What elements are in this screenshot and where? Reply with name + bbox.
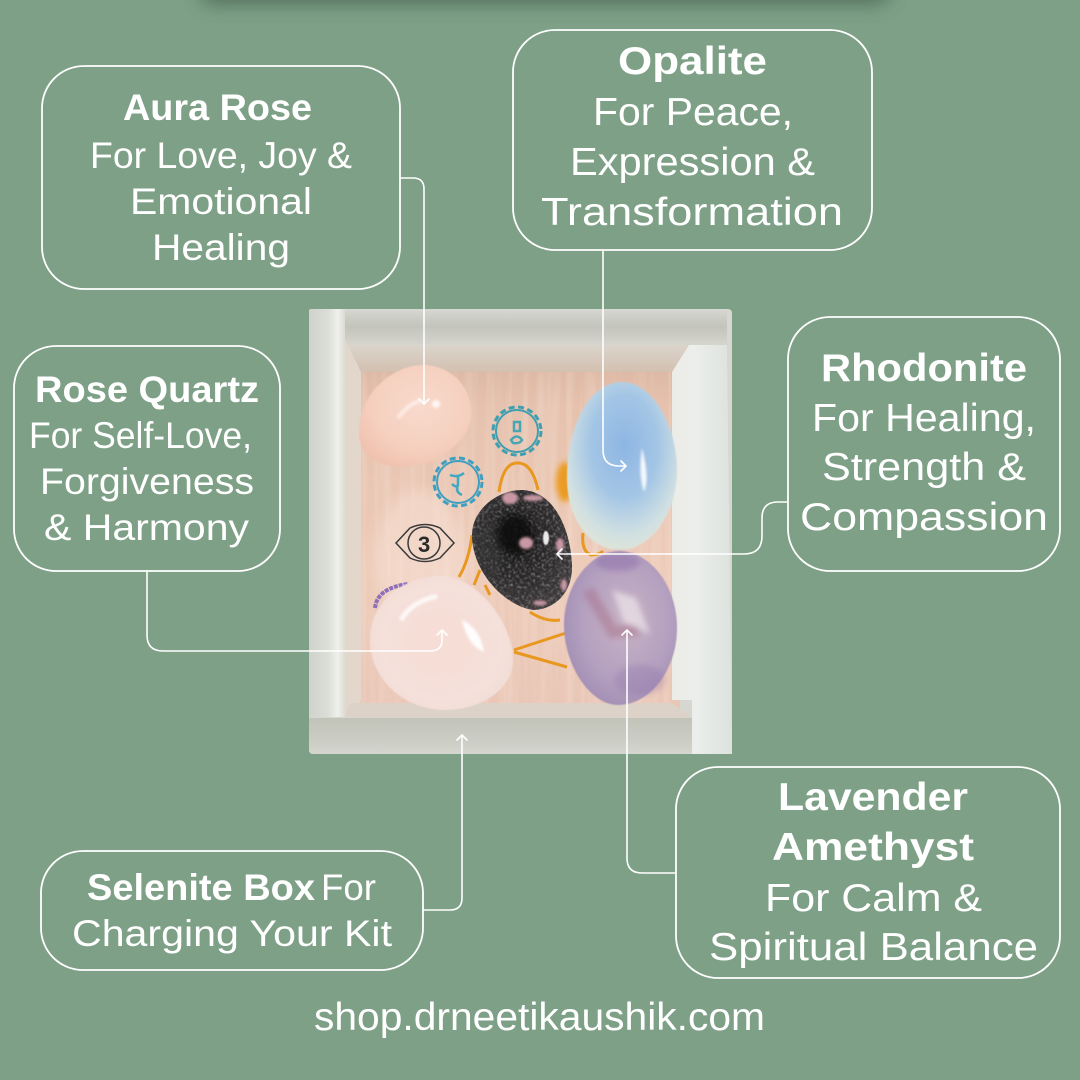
callout: Opalite: Expression & xyxy=(570,141,815,184)
callout: Rose Quartz: Rose Quartz xyxy=(35,369,259,410)
callout: Rose Quartz: For Self-Love, xyxy=(29,415,252,456)
arrow: Rhodonite xyxy=(557,502,788,559)
callout: Selenite Box: Selenite Box xyxy=(87,867,315,908)
top shadow band xyxy=(200,0,890,4)
arrow: Opalite xyxy=(603,250,626,471)
callout: Aura Rose: Healing xyxy=(152,227,290,268)
callout: Selenite Box: For xyxy=(321,867,376,908)
callout: Opalite: Transformation xyxy=(541,191,843,234)
callout: Opalite: For Peace, xyxy=(593,91,793,134)
callout: Lavender Amethyst xyxy=(676,767,1060,978)
callout: Rose Quartz xyxy=(14,346,280,571)
stone: opalite xyxy=(567,382,677,550)
callout: Selenite Box: Charging Your Kit xyxy=(72,913,393,954)
callout: Rhodonite: Rhodonite xyxy=(821,347,1027,390)
callout: Rose Quartz: Forgiveness xyxy=(40,461,254,502)
stone: rhodonite xyxy=(470,488,575,613)
callout: Opalite: Opalite xyxy=(618,40,767,83)
callout: Opalite xyxy=(513,30,872,250)
callout: Selenite Box xyxy=(41,851,423,970)
callout: Lavender Amethyst: Spiritual Balance xyxy=(709,926,1038,969)
arrow: Lavender Amethyst xyxy=(622,630,676,873)
arrow: Aura Rose xyxy=(400,178,429,404)
stone: rose quartz xyxy=(370,576,513,710)
orange chakra lines xyxy=(459,462,603,667)
chakra symbol: black three xyxy=(396,524,454,562)
chakra symbol: teal crown xyxy=(493,407,541,455)
chakra symbol: black three: 3 xyxy=(418,532,430,557)
website url: shop.drneetikaushik.com xyxy=(314,996,765,1039)
callout: Lavender Amethyst: For Calm & xyxy=(765,877,982,920)
callout: Rhodonite xyxy=(788,317,1060,571)
arrow: Rose Quartz xyxy=(147,571,447,651)
chakra symbol: teal third eye xyxy=(434,458,482,506)
callout: Aura Rose: Aura Rose xyxy=(123,87,312,128)
callout: Rhodonite: For Healing, xyxy=(812,397,1036,440)
callout: Aura Rose: Emotional xyxy=(130,181,312,222)
callout: Rhodonite: Compassion xyxy=(800,496,1048,539)
arrow: Selenite Box xyxy=(423,735,467,910)
selenite box body xyxy=(309,309,732,754)
stone: lavender amethyst xyxy=(564,551,677,705)
purple beaded ring xyxy=(375,584,408,608)
callout: Aura Rose: For Love, Joy & xyxy=(90,135,352,176)
callout: Rhodonite: Strength & xyxy=(822,446,1026,489)
callout: Lavender Amethyst: Amethyst xyxy=(772,826,974,869)
callout: Rose Quartz: & Harmony xyxy=(44,507,250,548)
callout: Lavender Amethyst: Lavender xyxy=(778,776,968,819)
callout: Aura Rose xyxy=(42,66,400,289)
photo: selenite box with crystals xyxy=(309,309,732,754)
stone: aura rose xyxy=(359,365,471,467)
